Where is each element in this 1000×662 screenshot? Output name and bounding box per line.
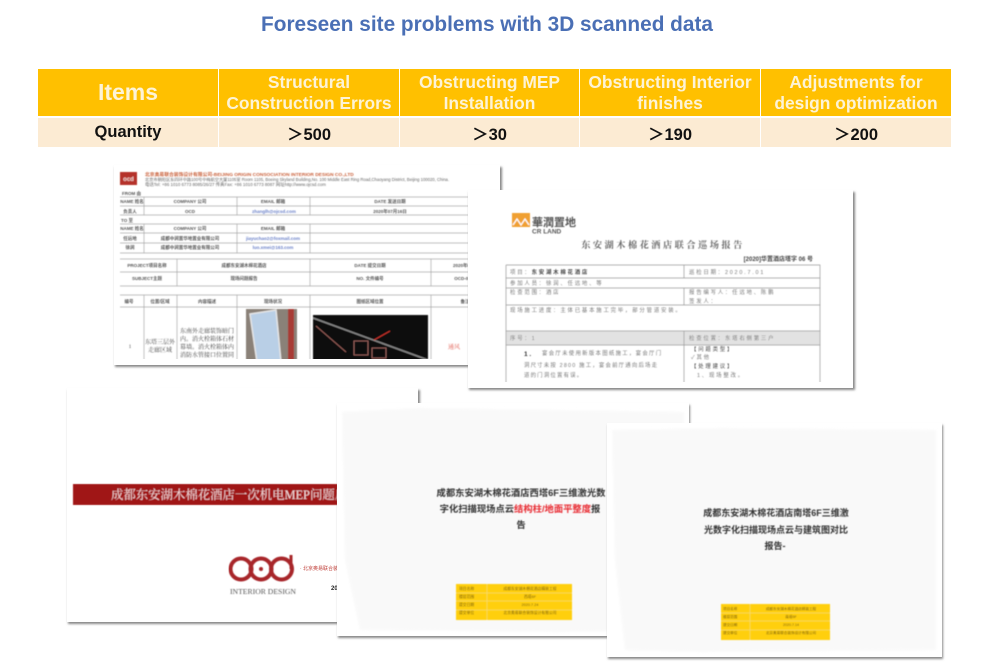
report table text: 检查位置：东塔右侧第三户 — [689, 334, 775, 342]
memo table text: SUBJECT主题 — [132, 275, 162, 282]
yellow info table: 北京奥易联合装饰设计有限公司 — [766, 630, 817, 635]
memo floor plan — [313, 315, 428, 361]
report table grid — [506, 265, 820, 385]
memo issue row: 东塔三层外 — [145, 338, 176, 346]
memo table text: jiayuchao2@foxmail.com — [245, 236, 300, 241]
report table text — [510, 268, 775, 379]
memo table text: OCD — [185, 209, 196, 214]
memo site photo — [246, 309, 297, 362]
row label: Quantity: Quantity — [95, 123, 161, 141]
yellow info table: 南塔6F — [785, 614, 797, 619]
memo table text: OCD-0001 — [454, 276, 476, 281]
gray row band — [506, 331, 820, 345]
yellow info table: 2020.7.14 — [783, 623, 799, 627]
memo table text: DATE 发送日期 — [374, 198, 406, 205]
cover title — [703, 507, 849, 551]
header cell: Items: Items — [98, 79, 158, 105]
report table text: 序号：1 — [510, 334, 536, 342]
memo letterhead: 电话Tel: +86 1010 6773 8085/26/27 传真Fax: +86 1010 6773 8087 网址http://www.ojcsd.com — [145, 181, 326, 188]
cover title: 光数字化扫描现场点云与建筑图对比 — [704, 524, 848, 535]
header cell: Structural Construction Errors: Construction Errors — [226, 92, 392, 112]
memo issue row: 走廊区域 — [148, 346, 172, 354]
report table text: 洞尺寸未按 2800 施工，宴会前厅通向后场走 — [524, 361, 658, 369]
value: structural errors — [219, 118, 399, 147]
memo table text: TO 至 — [121, 218, 133, 223]
header cell: Structural Construction Errors: Structural — [268, 72, 350, 92]
memo table text: DATE 提交日期 — [354, 262, 386, 269]
cover title: 告 — [516, 519, 526, 530]
report table text: 1. — [524, 351, 533, 358]
memo issue row — [129, 327, 460, 359]
title: Foreseen site problems with 3D scanned data — [261, 13, 713, 36]
report table text: 巡检日期：2020.7.01 — [689, 268, 765, 276]
memo table text: NO. 文件编号 — [356, 275, 384, 282]
memo issue row: 1 — [129, 345, 132, 350]
memo table text: 编号 — [124, 298, 134, 305]
yellow info table — [456, 584, 572, 620]
cover background texture — [612, 428, 936, 652]
memo issue row: 通风 — [448, 343, 460, 351]
document: MEP issue feedback cover — [67, 388, 420, 624]
memo table text: 2020年07月 — [453, 262, 477, 269]
red title banner: 成都东安湖木棉花酒店一次机电MEP问题反馈 — [111, 487, 360, 502]
value: interior finishes: ＞190 — [648, 126, 692, 144]
memo table text: COMPANY 公司 — [174, 199, 207, 205]
summary table — [38, 69, 951, 147]
row label: Quantity — [38, 118, 218, 147]
memo logo: ocd — [123, 177, 134, 183]
value: interior finishes — [580, 118, 760, 147]
yellow info table: 提交日期 — [459, 602, 474, 607]
yellow info table: 成都东安湖木棉花酒店精装工程 — [503, 586, 557, 591]
cover title — [437, 487, 606, 530]
value: design adjustments: ＞200 — [834, 126, 878, 144]
company name: · 北京奥易联合装饰设计 — [300, 565, 353, 572]
CR Land logo: 華潤置地 — [532, 215, 576, 229]
report heading: 东安湖木棉花酒店联合巡场报告 — [581, 239, 745, 250]
report table text: 报告编写人：任远地、陈鹏 — [689, 288, 775, 296]
yellow info table: 楼层范围 — [459, 594, 474, 599]
report table text: 项目：东安湖木棉花酒店 — [510, 268, 589, 276]
OCD logo: INTERIOR DESIGN — [230, 587, 296, 596]
yellow info table — [721, 604, 830, 640]
yellow info table: 项目名称 — [723, 606, 738, 611]
header cell: Obstructing Interior finishes: finishes — [637, 92, 703, 112]
memo table text: EMAIL 邮箱 — [261, 198, 286, 205]
value: structural errors: ＞500 — [287, 126, 331, 144]
memo table text: zhanglh@ojcsd.com — [252, 209, 296, 214]
header cell: Adjustments for design optimization: Adjustments for — [789, 72, 923, 92]
header cell: Obstructing MEP Installation — [400, 69, 579, 116]
header cell: Obstructing MEP Installation: Installation — [444, 92, 535, 112]
memo table text: NAME 姓名 — [120, 198, 144, 205]
memo table text: NAME 姓名 — [120, 225, 144, 232]
yellow info table: 成都东安湖木棉花酒店精装工程 — [766, 606, 817, 611]
value: MEP: ＞30 — [472, 126, 507, 144]
memo table text: 位置/区域 — [150, 298, 170, 305]
memo issue row: 内。消火栓箱体石材 — [180, 335, 234, 343]
report table text: 【问题类型】 — [691, 345, 734, 353]
report table text: 1、现场整改。 — [697, 371, 745, 379]
memo letterhead: 北京市朝阳区东四环中路100号中梅航空大厦1105室 Room 1105, Boeing Skyland Building,No. 100 Middle East Ring Road,Chaoyang District, Beijing 100020, China. — [145, 176, 449, 183]
CR Land logo: CR LAND — [532, 228, 562, 236]
memo issue row: 消防水管接口位置同 — [180, 351, 234, 359]
document: south tower scan comparison cover — [607, 423, 943, 659]
header cell: Items — [38, 69, 218, 116]
yellow info table: 北京奥易联合装饰设计有限公司 — [503, 610, 557, 615]
yellow info table: 西塔6F — [524, 594, 537, 599]
memo table text: 成都中润置华地置业有限公司 — [161, 244, 220, 251]
header cell: Adjustments for design optimization: design optimization — [774, 92, 938, 112]
memo issue row: 幕墙。消火栓箱体内 — [180, 343, 234, 351]
memo table text: 图纸区域位置 — [356, 298, 384, 305]
memo table text: 徐润 — [126, 244, 135, 251]
cover date: 2020 — [331, 586, 345, 592]
yellow info table: 提交日期 — [723, 622, 738, 627]
memo table text: 负责人 — [123, 208, 137, 215]
memo letterhead: 北京奥易联合装饰设计有限公司-BEIJING ORIGIN CONSOCIATION INTERIOR DESIGN CO.,LTD — [145, 171, 354, 178]
report table text: ✓其他 — [691, 353, 711, 361]
memo table text: FROM 由 — [122, 190, 141, 197]
report thumbnails — [66, 166, 944, 660]
header cell: Structural Construction Errors — [219, 69, 399, 116]
red title banner — [73, 484, 363, 505]
memo table text: 现场状况 — [264, 298, 282, 305]
document: CR Land joint inspection report — [468, 190, 855, 390]
header cell: Adjustments for design optimization — [761, 69, 951, 116]
report table text: 宴会厅未使用新版本图纸施工，宴会厅门 — [542, 349, 662, 357]
memo table text — [120, 190, 477, 305]
memo table text: 备注 — [460, 298, 470, 305]
document: OCD site memo — [114, 165, 502, 367]
header cell: Obstructing MEP Installation: Obstructing MEP — [419, 72, 560, 92]
cover background texture — [342, 408, 684, 632]
yellow info table: 项目名称 — [459, 586, 474, 591]
OCD logo — [230, 555, 296, 596]
memo issue row: 东南外走廊装饰暗门 — [180, 327, 234, 335]
report table text: 【处理建议】 — [691, 362, 734, 370]
header cell: Obstructing Interior finishes — [580, 69, 760, 116]
memo table text: luo.xmei@163.com — [253, 245, 293, 250]
report table text: 签发人： — [689, 297, 718, 305]
memo table grid — [120, 197, 470, 360]
report table text: 参加人员：徐润、任远地、等 — [510, 279, 603, 287]
memo table text: 2020年07月16日 — [373, 208, 407, 215]
cover title: 成都东安湖木棉花酒店西塔6F三维激光数 — [437, 487, 606, 498]
yellow info table: 提交单位 — [723, 630, 738, 635]
value: design adjustments — [761, 118, 951, 147]
report table text: 道的门洞位置有误。 — [524, 371, 583, 379]
memo table text: COMPANY 公司 — [174, 226, 207, 232]
memo table text: 任远地 — [123, 235, 137, 242]
report table text: 现场施工进度：主体已基本施工完毕，部分管道安装。 — [510, 306, 683, 314]
cover title: 成都东安湖木棉花酒店南塔6F三维激 — [703, 507, 849, 518]
value: MEP — [400, 118, 579, 147]
report number: [2020]华置酒店塔字 06 号 — [744, 255, 813, 263]
memo table text: 内容描述 — [198, 298, 216, 305]
memo letterhead — [145, 171, 449, 188]
yellow info table: 2020.7.24 — [522, 603, 538, 607]
report table text: 检查范围：酒店 — [510, 288, 560, 296]
document: west tower scan report cover — [337, 403, 690, 638]
yellow info table: 提交单位 — [459, 610, 474, 615]
cover title: 报告- — [764, 540, 786, 551]
yellow info table: 楼层范围 — [723, 614, 738, 619]
memo table text: EMAIL 邮箱 — [261, 225, 286, 232]
cover title: 字化扫描现场点云结构柱/地面平整度报 — [440, 503, 601, 514]
memo table text: 现场问题报告 — [230, 275, 258, 282]
header cell: Obstructing Interior finishes: Obstructing Interior — [588, 72, 752, 92]
memo table text: PROJECT项目名称 — [127, 262, 167, 269]
memo logo — [120, 172, 137, 185]
memo table text: 成都中润置华地置业有限公司 — [161, 235, 220, 242]
memo table text: 成都东安湖木棉花酒店 — [222, 262, 267, 269]
CR Land logo — [512, 213, 576, 236]
